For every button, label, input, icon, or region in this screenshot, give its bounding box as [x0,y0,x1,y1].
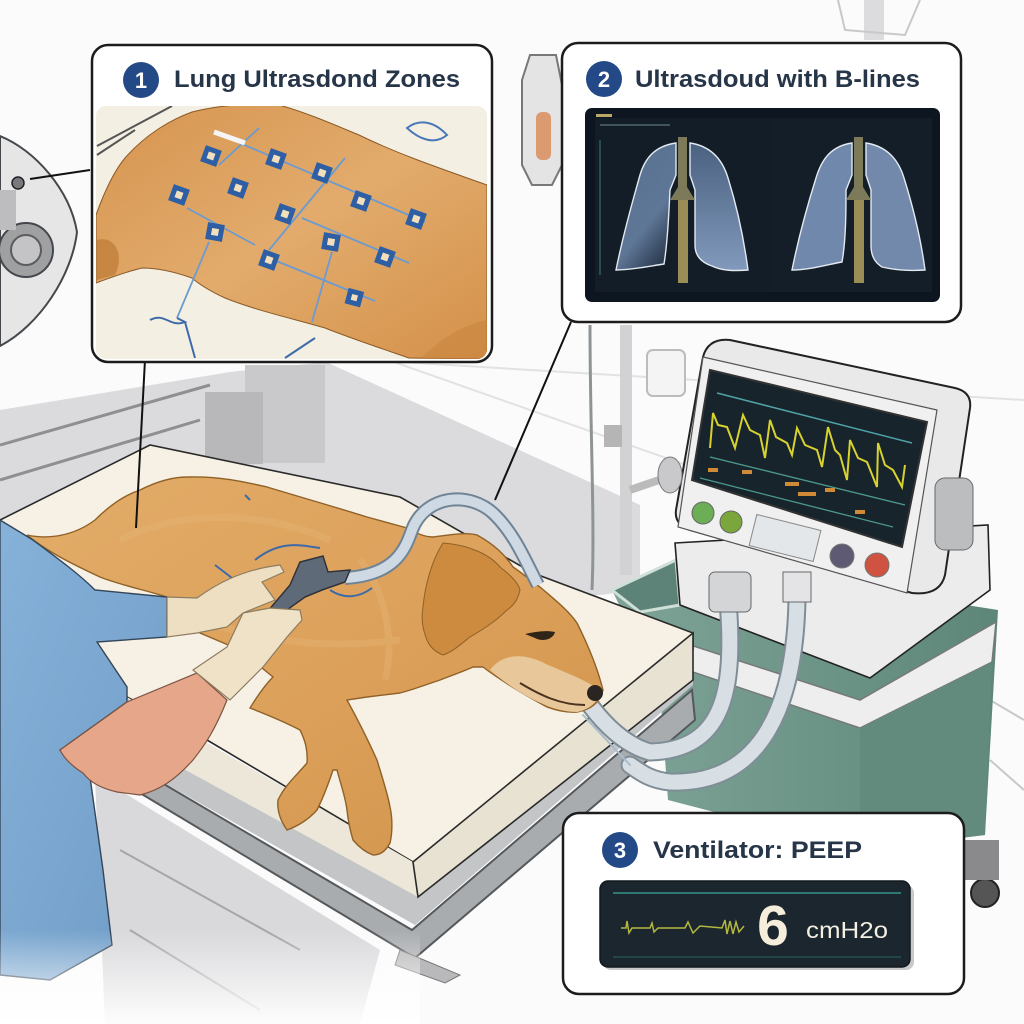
left lungs [616,143,748,271]
peep display: 6 [757,894,789,958]
dog [27,477,603,855]
heading 2: Ultrasdoud with B-lines [635,66,920,93]
peep display: cmH2o [806,917,888,943]
left clamp [658,457,682,493]
badge 1 [123,62,159,98]
zone markers [171,148,424,304]
fade at bottom-left [0,930,420,1024]
iv pole and bag [522,0,920,590]
ventilator monitor [658,340,990,678]
panel 2: ultrasound with b-lines [562,43,961,322]
panel 1: lung ultrasound zones [92,45,492,362]
probe device at left edge [0,136,90,346]
ultrasound probe tube [267,499,538,615]
vet in blue scrubs [0,520,302,980]
heading 3: Ventilator: PEEP [653,837,862,864]
muzzle [490,656,600,712]
badge 3 [602,832,638,868]
dog fur zone map [96,104,487,359]
gloves [167,565,284,637]
badge 1: 1 [135,68,147,93]
right lungs [792,143,925,270]
heading 1: Lung Ultrasdond Zones [174,66,460,93]
forearm [60,673,227,795]
fur highlights [120,518,400,680]
ear [422,543,520,655]
right clamp [935,478,973,550]
leader lines [136,322,571,528]
waveform [710,413,905,487]
table [0,445,695,983]
badge 2 [586,61,622,97]
panel 3: ventilator peep [563,813,964,994]
ultrasound screen [585,108,940,302]
badge 2: 2 [598,67,610,92]
cart [612,560,999,907]
badge 3: 3 [614,838,626,863]
buttons [692,502,714,524]
breathing tubes [583,572,811,782]
peep display [600,881,914,970]
